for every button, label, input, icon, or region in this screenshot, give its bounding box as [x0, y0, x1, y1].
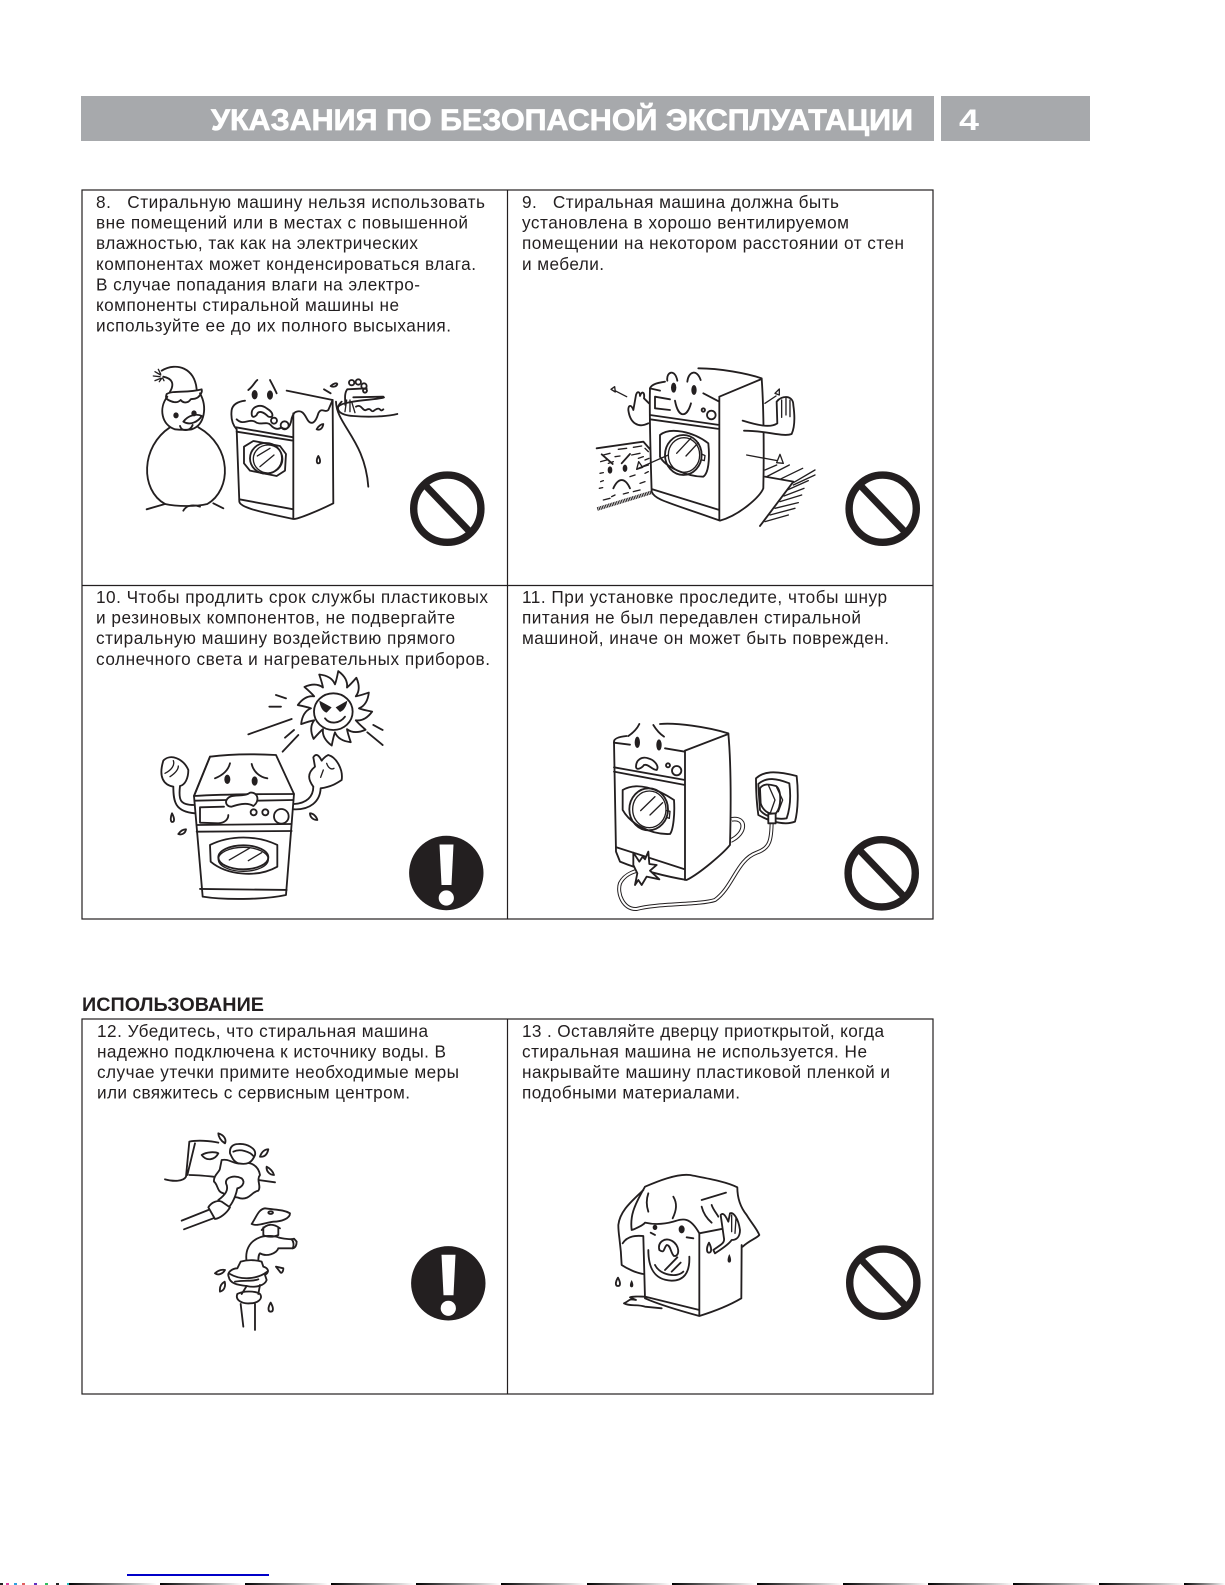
icon: prohibition sign 11	[848, 840, 915, 907]
panel text: item 9: и мебели.	[522, 254, 604, 274]
icon: warning sign 12	[411, 1246, 485, 1321]
scan artifact: blue underline	[127, 1574, 269, 1576]
panel text: item 13: подобными материалами.	[522, 1082, 740, 1102]
panel text: item 8: используйте ее до их полного высыхания.	[96, 316, 451, 336]
panel text: item 8: 8. Стиральную машину нельзя использовать	[96, 192, 485, 212]
panel text: item 13	[522, 1021, 890, 1102]
header bar: page number	[941, 96, 1090, 141]
panel text: item 8: компоненты стиральной машины не	[96, 295, 399, 315]
snowman	[147, 367, 225, 511]
panel text: item 12: 12. Убедитесь, что стиральная машина	[97, 1021, 428, 1041]
header bar: page number: 4	[959, 104, 980, 137]
panel text: item 11: машиной, иначе он может быть поврежден.	[522, 628, 889, 648]
machine body	[650, 368, 764, 521]
panel text: item 8	[96, 192, 485, 336]
panel text: item 13: стиральная машина не используется. Не	[522, 1042, 867, 1062]
illustration: washer on power cord	[614, 724, 798, 909]
panel text: item 8: вне помещений или в местах с повышенной	[96, 213, 468, 233]
panel text: item 10: и резиновых компонентов, не подвергайте	[96, 608, 455, 628]
illustration: washer under angry sun	[161, 671, 383, 899]
table: usage instructions grid	[82, 1019, 933, 1394]
hands	[628, 392, 794, 435]
tap connection	[215, 1208, 297, 1330]
illustration: covered washing machine	[616, 1175, 759, 1316]
cord outer loop	[619, 819, 772, 909]
panel text: item 8: влажностью, так как на электрических	[96, 233, 418, 253]
machine	[194, 754, 294, 899]
machine inlet connection	[165, 1133, 275, 1229]
table: upper instructions grid	[82, 190, 933, 919]
washing machine	[231, 380, 333, 519]
hand and drops	[616, 1213, 740, 1287]
illustration: leaking hose connections	[165, 1133, 297, 1330]
illustration: snowman and washing machine	[147, 367, 397, 519]
panel text: item 10: стиральную машину воздействию прямого	[96, 628, 455, 648]
machine	[614, 724, 731, 880]
icon: warning sign 10	[409, 836, 483, 910]
panel text: item 9: установлена в хорошо вентилируемом	[522, 213, 849, 233]
distance markers	[611, 387, 783, 469]
crushed spark	[633, 852, 659, 885]
panel text: item 10: 10. Чтобы продлить срок службы пластиковых	[96, 587, 488, 607]
panel text: item 8: компонентах может конденсироваться влага.	[96, 254, 476, 274]
panel text: item 9: 9. Стиральная машина должна быть	[522, 192, 839, 212]
hose and tap	[324, 379, 397, 487]
wall with sad face	[597, 442, 652, 509]
heading: usage section: ИСПОЛЬЗОВАНИЕ	[82, 994, 264, 1016]
panel text: item 12: случае утечки примите необходимые меры	[97, 1062, 459, 1082]
panel text: item 13: 13 . Оставляйте дверцу приоткрытой, когда	[522, 1021, 884, 1041]
icon: prohibition sign 13	[850, 1249, 917, 1316]
panel text: item 12: или свяжитесь с сервисным центром.	[97, 1082, 410, 1102]
illustration: washer between walls	[597, 368, 815, 526]
machine body	[643, 1225, 742, 1316]
header bar: title: УКАЗАНИЯ ПО БЕЗОПАСНОЙ ЭКСПЛУАТАЦИИ	[211, 103, 913, 137]
arms and fists	[161, 755, 342, 834]
panel text: item 10	[96, 587, 490, 669]
panel text: item 11: 11. При установке проследите, чтобы шнур	[522, 587, 887, 607]
panel text: item 9	[522, 192, 904, 274]
wall socket and plug	[756, 772, 798, 823]
panel text: item 11: питания не был передавлен стиральной	[522, 608, 861, 628]
plastic cover	[618, 1175, 759, 1308]
panel text: item 8: В случае попадания влаги на электро-	[96, 274, 420, 294]
panel text: item 10: солнечного света и нагревательных приборов.	[96, 649, 490, 669]
panel text: item 9: помещении на некотором расстоянии от стен	[522, 233, 904, 253]
panel text: item 13: накрывайте машину пластиковой пленкой и	[522, 1062, 890, 1082]
icon: prohibition sign 8	[414, 475, 481, 542]
icon: prohibition sign 9	[849, 475, 916, 542]
header bar: title	[81, 96, 934, 141]
sun	[248, 671, 383, 752]
right wall hatch	[760, 465, 815, 526]
panel text: item 12	[97, 1021, 459, 1102]
panel text: item 12: надежно подключена к источнику воды. В	[97, 1042, 446, 1062]
panel text: item 11	[522, 587, 889, 648]
scan artifact: bottom gradient strip	[0, 1583, 1225, 1585]
